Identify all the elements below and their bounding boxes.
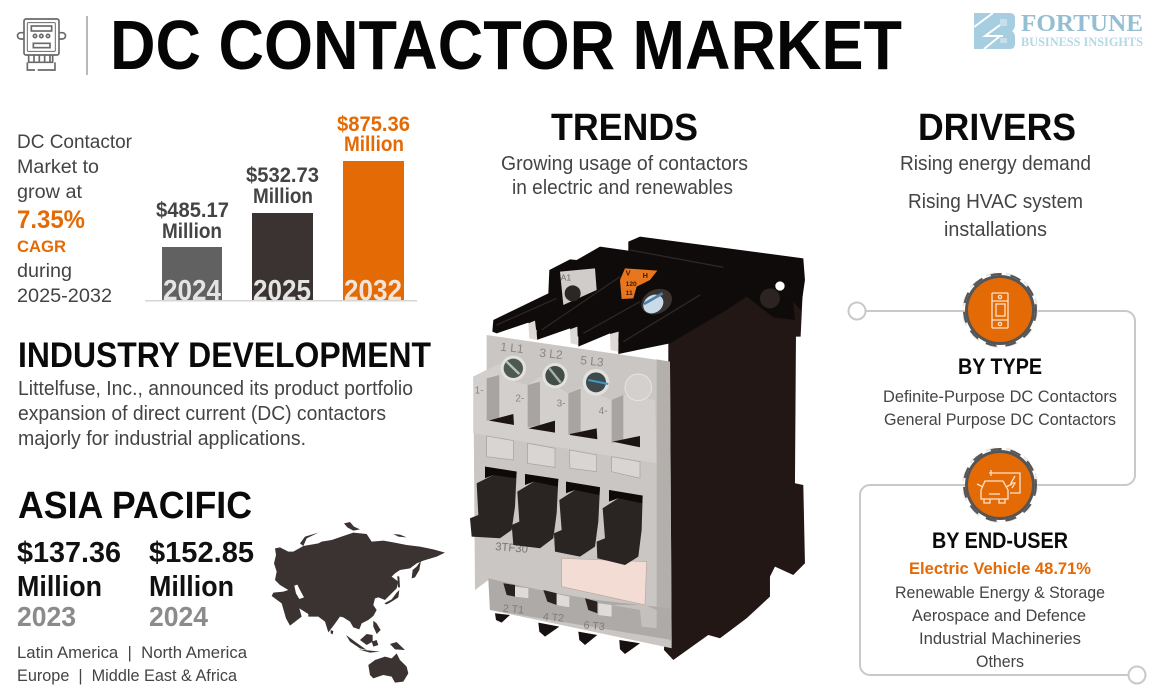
bar 2025: Million	[253, 185, 313, 208]
stat 2023	[17, 537, 121, 632]
illustration: DC contactor: H	[643, 271, 648, 280]
by end-user block	[895, 528, 1105, 671]
icon: electric car in gear badge	[963, 448, 1037, 522]
contactor grey face	[473, 335, 672, 648]
text block: CAGR summary: 7.35%	[17, 206, 85, 234]
by end-user block: Renewable Energy & Storage	[895, 583, 1105, 602]
stat 2024: Million	[149, 571, 234, 603]
A1 terminal	[560, 268, 597, 305]
stat 2024: 2024	[149, 601, 208, 632]
bar 2032: 2032	[344, 275, 402, 307]
drivers block: DRIVERS	[918, 107, 1076, 149]
panel: Asia Pacific	[17, 485, 254, 685]
icon: switch in gear badge	[963, 273, 1037, 347]
illustration: DC contactor: 2 T1	[502, 603, 525, 616]
bar chart: market size	[145, 113, 417, 307]
bar 2024: $485.17	[156, 199, 229, 222]
by end-user block: Industrial Machineries	[919, 629, 1081, 648]
drivers block: installations	[944, 219, 1047, 241]
other regions: Latin America | North America	[17, 643, 248, 662]
logo: Fortune Business Insights: FORTUNE	[1021, 11, 1143, 37]
trends block: Growing usage of contactors	[501, 153, 748, 175]
by end-user block: Others	[976, 652, 1024, 671]
illustration: DC contactor: 11	[626, 290, 633, 297]
text block: CAGR summary	[17, 132, 133, 307]
illustration: DC contactor	[470, 237, 805, 660]
illustration: DC contactor: 4 T2	[542, 611, 565, 625]
text block: CAGR summary: 2025-2032	[17, 286, 112, 307]
stat 2023: Million	[17, 571, 102, 603]
top silhouette with fins	[492, 237, 805, 354]
text block: CAGR summary: DC Contactor	[17, 132, 133, 153]
by type block	[883, 354, 1117, 429]
illustration: DC contactor: A1	[561, 273, 571, 283]
header divider	[86, 16, 88, 75]
logo: Fortune Business Insights	[974, 11, 1143, 49]
bar 2025	[246, 164, 319, 307]
bar 2032: Million	[344, 133, 404, 156]
logo: Fortune Business Insights: BUSINESS INSIGHTS	[1021, 34, 1143, 49]
stat 2024: $152.85	[149, 537, 254, 569]
stat 2024	[149, 537, 254, 632]
screws	[501, 356, 526, 381]
bar 2032: $875.36	[337, 113, 410, 136]
terminal markings	[475, 340, 608, 556]
by end-user block: BY END-USER	[932, 528, 1068, 553]
stat 2023: $137.36	[17, 537, 121, 569]
text block: CAGR summary: grow at	[17, 182, 83, 203]
trends block: in electric and renewables	[512, 177, 733, 199]
trends block	[501, 107, 748, 199]
by end-user block: Electric Vehicle 48.71%	[909, 559, 1091, 578]
text block: CAGR summary: Market to	[17, 157, 99, 178]
terminal markings: 1-	[475, 385, 484, 396]
map: Asia Pacific	[272, 522, 445, 683]
bar 2025: 2025	[253, 275, 311, 307]
orange tag	[620, 268, 657, 299]
drivers block	[900, 107, 1091, 241]
text block: CAGR summary: CAGR	[17, 237, 66, 256]
pink label	[562, 558, 647, 605]
bar 2024	[156, 199, 229, 307]
panel: industry development	[18, 336, 431, 450]
silver screw	[637, 284, 676, 319]
bottom terminals	[488, 578, 672, 640]
connector lines	[848, 302, 1146, 684]
panel: industry development: expansion of direct current (DC) contactors	[18, 403, 386, 425]
bar 2024: Million	[162, 220, 222, 243]
panel: Asia Pacific: ASIA PACIFIC	[18, 485, 252, 527]
black switches	[470, 467, 643, 565]
bar 2024: 2024	[163, 275, 221, 307]
other regions: Europe | Middle East & Africa	[17, 666, 238, 685]
panel: industry development: majorly for industrial applications.	[18, 428, 306, 450]
terminal markings: 1 L1	[500, 340, 525, 356]
by type block: BY TYPE	[958, 354, 1042, 379]
terminal markings: 4-	[599, 406, 608, 417]
trends block: TRENDS	[551, 107, 698, 149]
panel: industry development: Littelfuse, Inc., announced its product portfolio	[18, 378, 413, 400]
bar 2025: $532.73	[246, 164, 319, 187]
illustration: DC contactor: V	[626, 268, 631, 277]
slots	[487, 375, 623, 443]
drivers block: Rising energy demand	[900, 153, 1091, 175]
bar 2032	[337, 113, 410, 307]
terminal markings: 3TF30	[495, 541, 528, 556]
bottom pins	[495, 613, 640, 654]
text block: CAGR summary: during	[17, 261, 72, 282]
other regions	[17, 643, 248, 685]
tabs between fins	[528, 321, 619, 352]
panel: industry development: INDUSTRY DEVELOPMENT	[18, 336, 431, 375]
terminal markings: 2-	[515, 394, 524, 405]
by type block: Definite-Purpose DC Contactors	[883, 387, 1117, 406]
contactor dark housing	[664, 280, 805, 660]
illustration: DC contactor: 6 T3	[583, 619, 605, 633]
by end-user block: Aerospace and Defence	[912, 606, 1086, 625]
terminal markings: 5 L3	[580, 353, 605, 369]
terminal markings: 3 L2	[539, 346, 564, 362]
fin highlights	[497, 250, 723, 342]
header icon: electric meter	[17, 19, 65, 70]
illustration: DC contactor: 120	[626, 281, 637, 288]
terminal markings: 3-	[557, 399, 566, 410]
title: DC CONTACTOR MARKET	[110, 6, 902, 84]
drivers block: Rising HVAC system	[908, 191, 1083, 213]
stat 2023: 2023	[17, 601, 76, 632]
by type block: General Purpose DC Contactors	[884, 410, 1116, 429]
